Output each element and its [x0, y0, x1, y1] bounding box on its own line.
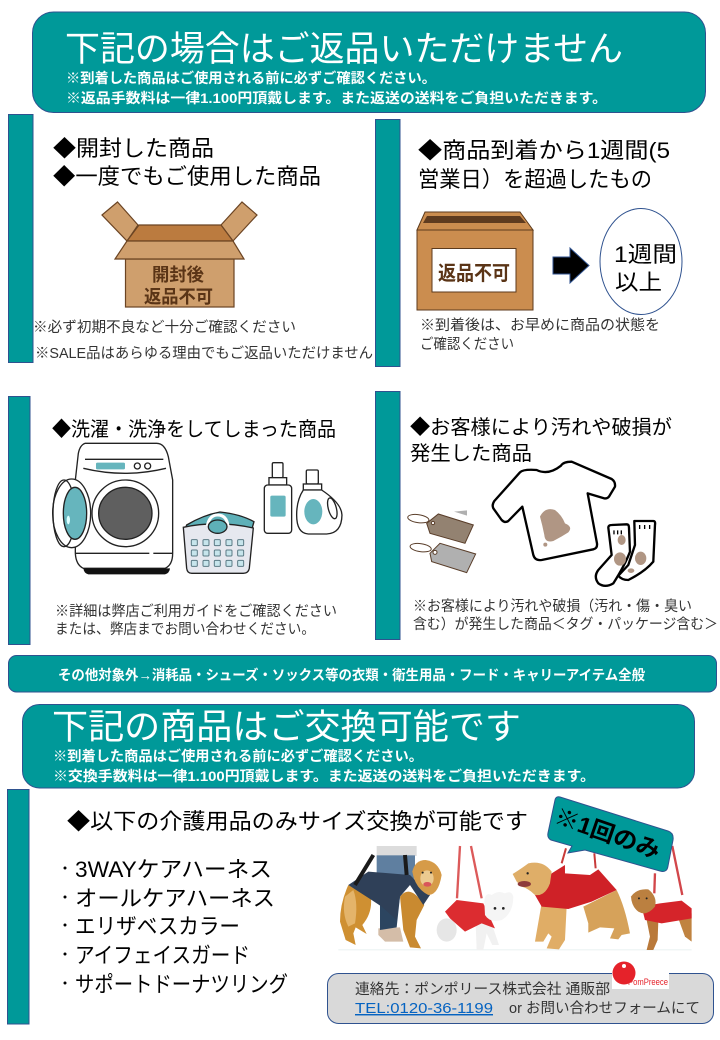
icon: laundry basket: [183, 512, 254, 573]
list: care items: アイフェイスガード: [75, 943, 250, 968]
banner: other excluded items: その他対象外→消耗品・シューズ・ソックス等の衣類・衛生用品・フード・キャリーアイテム全般: [58, 667, 645, 683]
callout: one week or more: 1週間: [614, 242, 677, 267]
heading: washed item: ◆洗濯・洗浄をしてしまった商品: [52, 418, 336, 441]
text: inspection note: ※必ず初期不良など十分ご確認ください: [33, 319, 296, 336]
icon: closed box: [417, 212, 533, 310]
text: check early note: ※到着後は、お早めに商品の状態を: [420, 317, 660, 334]
icon: company logo: PomPreece: [628, 977, 668, 987]
panel: no returns header: [32, 12, 706, 112]
list: care items: エリザベスカラー: [75, 914, 240, 939]
text: exchange fee notice: ※交換手数料は一律1.100円頂戴します。また返送の送料をご負担いただきます。: [53, 768, 595, 784]
panel: washed items: [8, 396, 342, 644]
panel: opened or used items: [8, 114, 373, 362]
heading: damaged item: ◆お客様により汚れや破損が: [410, 416, 672, 439]
panel: over one week: ご確認ください: [420, 336, 514, 353]
heading: exchange available: 下記の商品はご交換可能です: [52, 708, 521, 747]
heading: size exchange: ◆以下の介護用品のみサイズ交換が可能です: [67, 809, 528, 834]
icon: opened box: [102, 202, 257, 307]
list: care items: サポートドーナツリング: [75, 972, 288, 997]
icon: stained socks: [596, 521, 655, 586]
panel: damaged items: 発生した商品: [410, 442, 532, 465]
panel: contact: [328, 962, 714, 1024]
dog 1 with navy harness: [340, 846, 442, 948]
icon: washing machine: [53, 443, 173, 574]
icon: detergent bottle: [297, 470, 342, 534]
text: contact form: or お問い合わせフォームにて: [509, 1000, 700, 1017]
text: sale note: ※SALE品はあらゆる理由でもご返品いただけません: [35, 345, 373, 362]
icon: price tags: [407, 510, 476, 573]
icon: opened box: 返品不可: [144, 287, 213, 307]
text: phone number: TEL:0120-36-1199: [355, 1001, 493, 1017]
text: check notice: ※到着した商品はご使用される前に必ずご確認ください。: [66, 70, 436, 86]
banner: other excluded items: [8, 656, 716, 692]
icon: stained items illustration: [407, 462, 655, 586]
dog 2 with red harness: [437, 846, 513, 950]
callout: one week or more: [600, 208, 682, 314]
callout: one time only: [548, 797, 673, 871]
list: care items: [64, 857, 288, 997]
heading: opened item: ◆開封した商品: [53, 136, 214, 161]
heading: one week exceeded: ◆商品到着から1週間(5: [418, 138, 670, 163]
icon: laundry illustration: [53, 443, 342, 574]
list: care items: 3WAYケアハーネス: [75, 857, 272, 882]
panel: over one week: [376, 120, 682, 366]
icon: opened box: 開封後: [152, 265, 204, 285]
text: contact name: 連絡先：ポンポリース株式会社 通販部: [355, 981, 610, 998]
icon: spray bottle: [264, 463, 292, 533]
icon: closed box: 返品不可: [438, 262, 510, 285]
panel: exchangeable items: [8, 790, 714, 1024]
photo: dogs in harnesses: [338, 846, 692, 950]
callout: one time only: ※1回のみ: [551, 803, 664, 864]
text: check notice: ※到着した商品はご使用される前に必ずご確認ください。: [53, 748, 423, 764]
panel: damaged items: [376, 392, 718, 640]
icon: stained t-shirt: [493, 462, 615, 560]
dog 3 with red harness: [513, 848, 630, 949]
panel: washed items: または、弊店までお問い合わせください。: [55, 621, 315, 638]
heading: no returns: 下記の場合はご返品いただけません: [65, 30, 623, 69]
text: damage note: ※お客様により汚れや破損（汚れ・傷・臭い: [413, 598, 692, 615]
text: return fee notice: ※返品手数料は一律1.100円頂戴します。また返送の送料をご負担いただきます。: [66, 90, 607, 106]
heading: used item: ◆一度でもご使用した商品: [53, 164, 321, 189]
arrow: to one week: [553, 248, 589, 283]
callout: one week or more: 以上: [615, 270, 662, 295]
dog 4 with red harness: [631, 846, 692, 950]
panel: over one week: 営業日）を超過したもの: [418, 167, 652, 192]
list: care items: オールケアハーネス: [75, 886, 275, 911]
icon: company logo: [612, 962, 669, 989]
text: guide note: ※詳細は弊店ご利用ガイドをご確認ください: [55, 603, 337, 620]
panel: exchange header: [22, 704, 694, 788]
